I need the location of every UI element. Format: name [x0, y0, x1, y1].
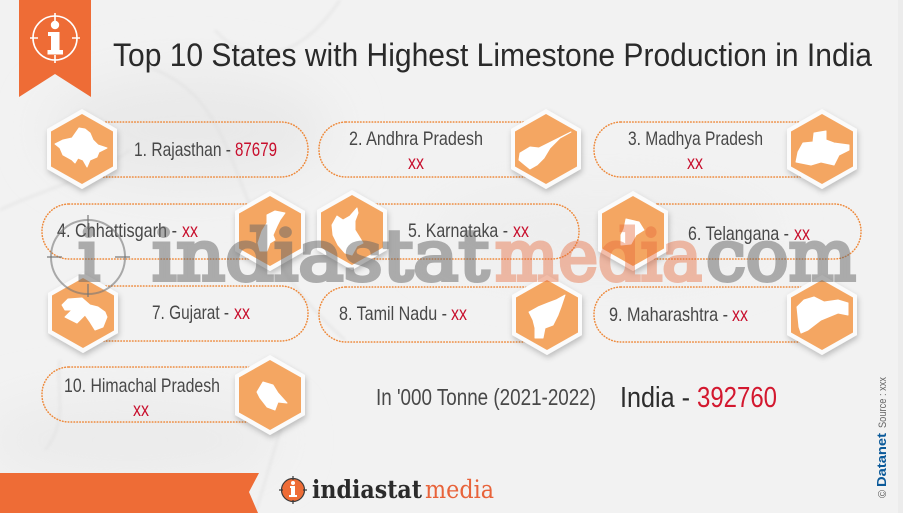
panel: 8 Tamil Nadu: 8. Tamil Nadu -	[339, 303, 447, 325]
panel: 3 Madhya Pradesh: xx	[687, 152, 703, 174]
panel: 2 Andhra Pradesh	[319, 109, 581, 189]
panel: 7 Gujarat: xx	[234, 302, 250, 324]
map: Karnataka	[332, 208, 363, 255]
footer logo: indiastat	[312, 475, 422, 504]
panel: 2 Andhra Pradesh: xx	[408, 152, 424, 174]
watermark	[47, 215, 856, 297]
panel: 9 Maharashtra: xx	[732, 304, 748, 326]
footer logo	[279, 475, 494, 504]
footer logo: media	[425, 475, 494, 504]
icon: info target	[30, 13, 80, 63]
panel: 9 Maharashtra: 9. Maharashtra -	[609, 304, 728, 326]
panel: 10 Himachal Pradesh: 10. Himachal Pradesh	[64, 375, 220, 397]
India total: 392760	[697, 382, 777, 414]
map: Maharashtra	[797, 297, 848, 333]
map: Gujarat	[62, 298, 107, 330]
panel: 8 Tamil Nadu	[319, 275, 582, 355]
panel: 7 Gujarat: 7. Gujarat -	[152, 302, 229, 324]
panel: 3 Madhya Pradesh: 3. Madhya Pradesh	[628, 128, 763, 150]
panel: 5 Karnataka: xx	[513, 220, 529, 242]
panel: 4 Chhattisgarh	[42, 191, 305, 271]
panel: 6 Telangana	[598, 191, 861, 271]
vertical source credit: Datanet	[874, 432, 889, 487]
panel: 6 Telangana: 6. Telangana -	[688, 223, 789, 245]
vertical source credit: ©	[877, 490, 889, 498]
India total	[620, 382, 777, 414]
panel: 4 Chhattisgarh: xx	[182, 220, 198, 242]
panel: 3 Madhya Pradesh	[594, 109, 857, 189]
panel: 1 Rajasthan: 87679	[235, 139, 277, 161]
India total: India -	[620, 382, 690, 414]
panel: 5 Karnataka	[317, 190, 579, 270]
title: Top 10 States with Highest Limestone Production in India	[113, 37, 872, 73]
vertical source credit: Source : xxx	[877, 377, 889, 428]
map: Rajasthan	[55, 128, 107, 167]
watermark: indiastat	[152, 215, 489, 297]
map: Madhya Pradesh	[796, 131, 849, 165]
map: Andhra Pradesh	[519, 132, 571, 169]
bookmark badge with info icon	[19, 0, 91, 97]
watermark: media	[495, 215, 702, 297]
panel: 7 Gujarat	[48, 273, 308, 353]
map: Telangana	[621, 219, 644, 245]
map: Tamil Nadu	[529, 295, 565, 338]
panel: 10 Himachal Pradesh: xx	[133, 399, 149, 421]
map: Chhattisgarh	[258, 211, 285, 251]
panel: 10 Himachal Pradesh	[42, 355, 305, 435]
panel: 1 Rajasthan	[47, 109, 308, 189]
watermark: com	[706, 215, 856, 297]
panel: 1 Rajasthan: 1. Rajasthan -	[134, 139, 231, 161]
map: Himachal Pradesh	[257, 382, 287, 410]
panel: 4 Chhattisgarh: 4. Chhattisgarh -	[57, 220, 177, 242]
panel: 5 Karnataka: 5. Karnataka -	[408, 220, 508, 242]
panel: 9 Maharashtra	[594, 275, 857, 355]
vertical source credit	[874, 377, 889, 498]
footer orange ribbon	[0, 473, 259, 513]
panel: 8 Tamil Nadu: xx	[451, 303, 467, 325]
panel: 6 Telangana: xx	[794, 223, 810, 245]
panel: 2 Andhra Pradesh: 2. Andhra Pradesh	[349, 128, 483, 150]
unit and year note: In '000 Tonne (2021-2022)	[376, 384, 596, 410]
watermark: i	[78, 215, 100, 297]
